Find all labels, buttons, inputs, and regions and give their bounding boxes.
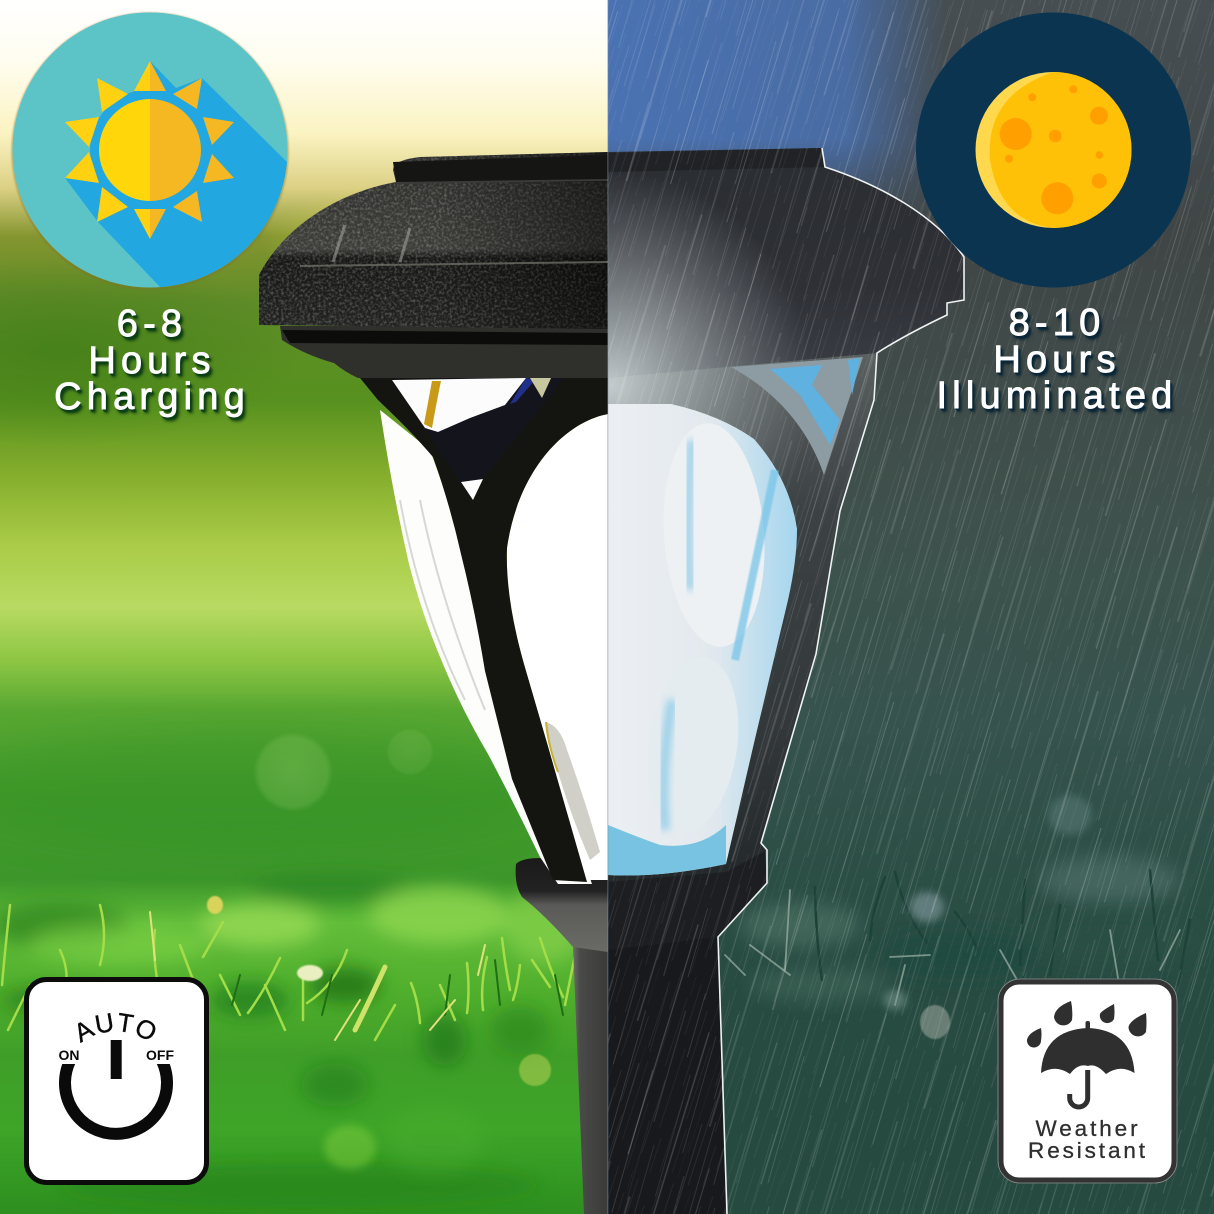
rain over lamp and background: [608, 0, 1214, 1214]
badge: auto on/off switch: AUTO: [78, 1012, 156, 1044]
center divider: [607, 0, 608, 1214]
badge: auto on/off switch: ON: [58, 1047, 80, 1063]
badge: weather resistant: [998, 979, 1177, 1183]
lamp collar: [516, 850, 767, 952]
badge: weather resistant: Resistant: [1028, 1138, 1148, 1163]
caption: 6-8 hours charging: [54, 303, 250, 423]
icon: umbrella: [1027, 1001, 1146, 1107]
icon: moon badge: [916, 12, 1191, 288]
icon: sun badge: [11, 12, 290, 290]
lamp: [259, 0, 1214, 1214]
badge: auto on/off switch: [24, 977, 209, 1185]
caption: 6-8 hours charging: Charging: [54, 376, 250, 418]
center haze: [608, 184, 796, 470]
right top window: [731, 357, 863, 475]
right hood: [608, 148, 964, 378]
background: rainy night (right half): [608, 0, 1214, 1214]
left top window: [392, 375, 567, 500]
grass foreground (night): [725, 870, 1210, 1039]
left frame: [360, 372, 608, 882]
left hood: [259, 152, 608, 378]
right frame: [608, 353, 877, 882]
right glass: [608, 404, 797, 876]
badge: weather resistant: Weather: [1036, 1116, 1140, 1141]
caption: 6-8 hours charging: Hours: [88, 340, 216, 382]
badge: auto on/off switch: OFF: [146, 1047, 174, 1063]
caption: 8-10 hours illuminated: [937, 302, 1177, 417]
caption: 8-10 hours illuminated: Illuminated: [937, 375, 1177, 417]
caption: 6-8 hours charging: 6-8: [117, 303, 187, 345]
caption: 8-10 hours illuminated: 8-10: [1009, 302, 1105, 344]
left glass panels: [380, 410, 608, 884]
caption: 8-10 hours illuminated: Hours: [993, 338, 1121, 380]
white cut-out outline: [718, 148, 964, 1214]
grass foreground (day): [0, 874, 585, 1207]
background: sunny garden (left half): [0, 0, 640, 1214]
lamp stake: [573, 937, 727, 1214]
